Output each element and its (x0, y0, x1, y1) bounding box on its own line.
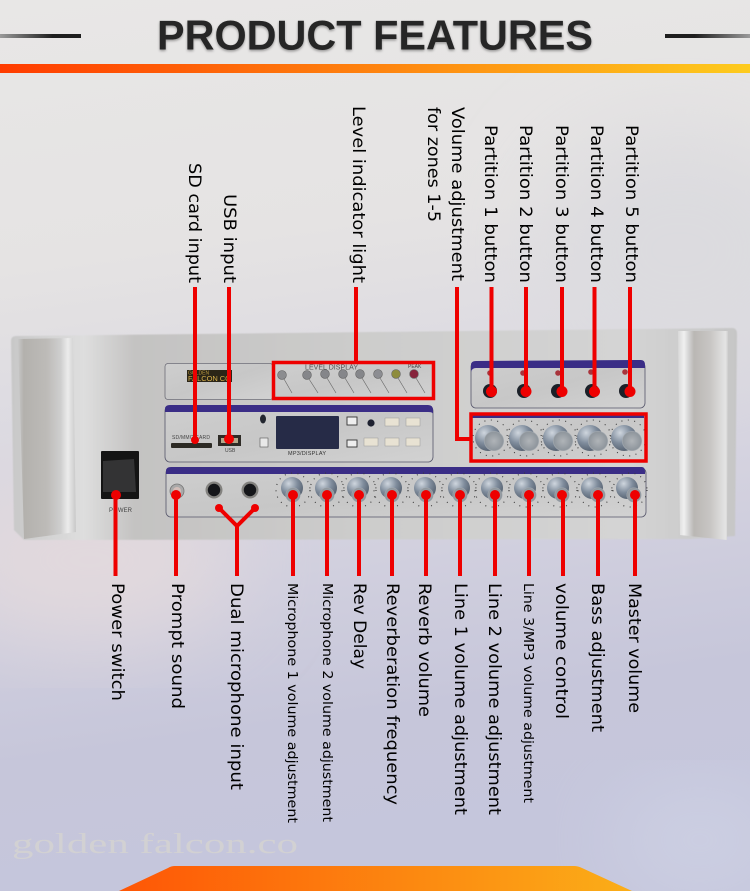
label: volume control: volume control (551, 583, 571, 719)
label: Microphone 1 volume adjustment: Microphone 1 volume adjustment (284, 583, 300, 823)
prompt button (170, 484, 184, 498)
right handle (678, 331, 728, 540)
callout: microphone 1 (288, 490, 298, 576)
logo plate: GOLDEN (188, 370, 210, 376)
purple band (472, 415, 644, 418)
partition buttons (483, 384, 633, 398)
partition LEDs (487, 369, 628, 376)
callout: master (630, 490, 640, 576)
logo plate (187, 370, 232, 383)
callout: power switch (111, 490, 121, 576)
callout: prompt sound (171, 490, 181, 576)
mode icons (347, 417, 357, 447)
label: SD card input: SD card input (184, 163, 204, 283)
label: Dual microphone input: Dual microphone input (226, 583, 246, 790)
label: Master volume: Master volume (624, 583, 644, 713)
label: Level indicator light: Level indicator light (348, 106, 368, 283)
label: Line 2 volume adjustment: Line 2 volume adjustment (484, 583, 504, 815)
labels: bottom (107, 583, 644, 823)
right title line (665, 34, 750, 38)
logo plate: FALCON CO (188, 374, 231, 383)
callout: bass (593, 490, 603, 576)
amplifier device (11, 328, 737, 540)
callout: partition 3 (556, 287, 568, 397)
SD card slot: SD/MMC CARD (172, 435, 210, 441)
panel: level display: LEVEL DISPLAY (305, 364, 358, 372)
labels: top (184, 106, 641, 283)
mode icon (260, 438, 268, 447)
label: Microphone 2 volume adjustment: Microphone 2 volume adjustment (319, 583, 335, 822)
panel: level display (272, 363, 435, 399)
label: Power switch: Power switch (107, 583, 127, 701)
label: USB input: USB input (219, 194, 239, 283)
chassis (11, 328, 737, 540)
orange gradient bar (0, 64, 750, 73)
callout: partition 4 (589, 287, 600, 397)
label: Line 3/MP3 volume adjustment: Line 3/MP3 volume adjustment (520, 583, 536, 803)
red callouts: bottom (111, 490, 640, 576)
USB port (218, 435, 241, 454)
label: Partition 4 button: Partition 4 button (586, 125, 606, 283)
callout: partition 1 (486, 287, 497, 397)
panel: microphone and line inputs (166, 467, 647, 517)
power rocker switch (101, 451, 139, 514)
panel: logo (165, 364, 273, 400)
callout: dual microphone (215, 504, 259, 576)
callout: line 2 (490, 490, 500, 576)
label: Volume adjustment for zones 1-5: for zones 1-5 (423, 107, 443, 222)
callout: SD card (191, 287, 199, 444)
label: Bass adjustment: Bass adjustment (587, 583, 607, 732)
panel: MP3 player (165, 405, 433, 462)
purple band (166, 467, 645, 474)
display caption: MP3/DISPLAY (288, 451, 326, 457)
label: Partition 2 button: Partition 2 button (515, 125, 535, 283)
label: Volume adjustment for zones 1-5: Volume adjustment (447, 107, 467, 281)
callout: USB (224, 287, 234, 444)
bottom orange tab (119, 866, 632, 891)
LCD display (276, 416, 339, 449)
player buttons (364, 418, 420, 446)
purple band (165, 405, 433, 414)
panel: partition buttons (471, 360, 645, 408)
left handle (18, 338, 76, 539)
label: Reverb volume: Reverb volume (414, 583, 434, 717)
label: Partition 1 button: Partition 1 button (480, 125, 500, 283)
callout: line 3 (524, 490, 534, 576)
callout: level indicator box (274, 287, 434, 398)
zone knobs (473, 420, 646, 456)
left title line (0, 34, 81, 38)
callout: reverberation frequency (387, 490, 397, 576)
panel: zone volume knobs (471, 414, 646, 461)
callout: zone volume box (457, 287, 646, 461)
label: Prompt sound: Prompt sound (167, 583, 187, 709)
SD card slot (171, 435, 212, 448)
callout: line 1 (455, 490, 465, 576)
label: Line 1 volume adjustment: Line 1 volume adjustment (450, 583, 470, 815)
panel: level display: PEAK (408, 364, 422, 370)
callout: reverb volume (421, 490, 431, 576)
label: Partition 3 button: Partition 3 button (551, 125, 571, 283)
callout: volume control (557, 490, 567, 576)
power rocker switch: POWER (109, 508, 133, 514)
label: Reverberation frequency: Reverberation frequency (382, 583, 402, 805)
heading: PRODUCT FEATURES (157, 12, 593, 58)
label: Partition 5 button: Partition 5 button (621, 125, 641, 283)
knobs row (276, 473, 647, 507)
bluetooth icon (260, 414, 266, 424)
label: Volume adjustment for zones 1-5 (423, 107, 467, 281)
callout: microphone 2 (322, 490, 332, 576)
callout: rev delay (354, 490, 364, 576)
purple band (471, 360, 645, 372)
level LEDs (278, 370, 425, 393)
microphone jacks (206, 482, 258, 498)
IR sensor (367, 419, 375, 427)
callout: partition 5 (624, 287, 636, 397)
label: Rev Delay: Rev Delay (349, 583, 369, 669)
red callouts: top (191, 287, 646, 461)
USB port: USB (225, 448, 236, 454)
callout: partition 2 (520, 287, 532, 397)
title (0, 12, 750, 58)
watermark: golden falcon.co (12, 829, 298, 860)
